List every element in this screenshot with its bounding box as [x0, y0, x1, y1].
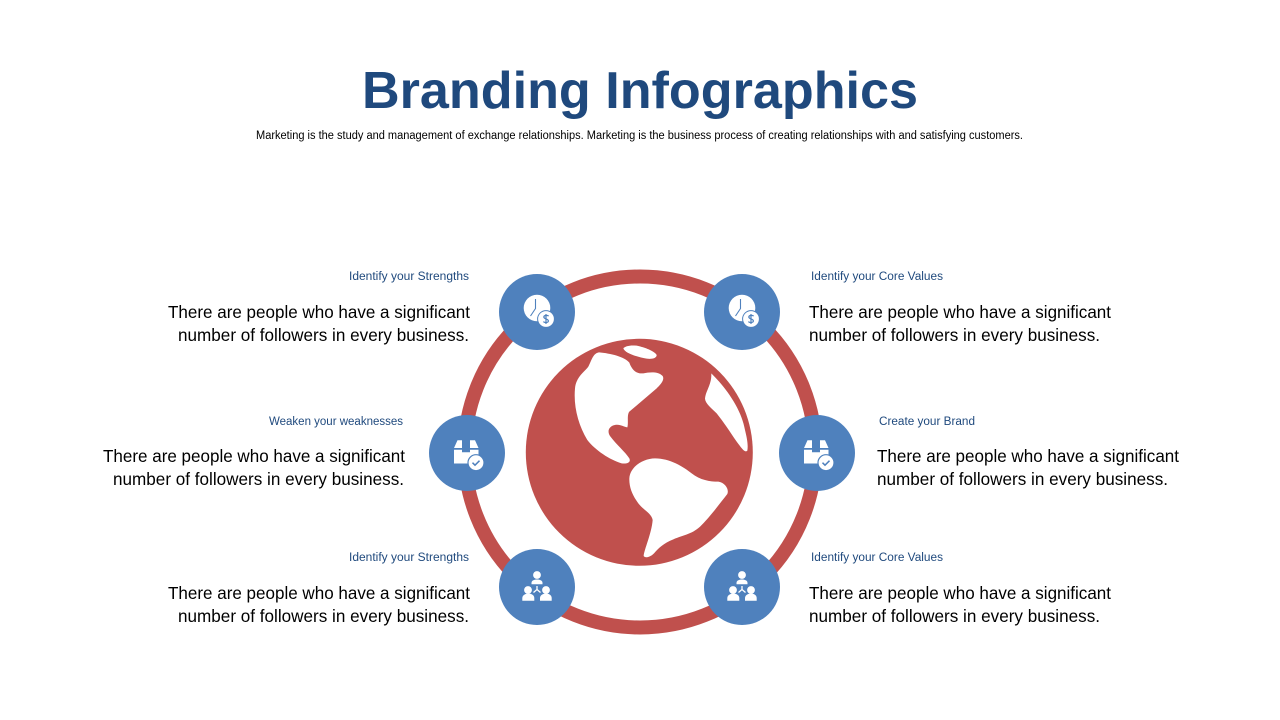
- text block: top right: There are people who have a significant: [809, 302, 1111, 322]
- text block: middle left: [103, 416, 405, 489]
- node: middle right: [779, 415, 855, 491]
- globe: [526, 339, 753, 566]
- text block: bottom right: There are people who have a significant: [809, 583, 1111, 603]
- text block: bottom right: Identify your Core Values: [811, 552, 943, 564]
- text block: middle right: [877, 416, 1179, 489]
- text block: middle right: number of followers in every business.: [877, 469, 1168, 489]
- text block: top left: number of followers in every business.: [178, 325, 469, 345]
- icon: people hierarchy: [522, 571, 552, 601]
- node: middle left: [429, 415, 505, 491]
- node: bottom left: [499, 549, 575, 625]
- text block: bottom right: number of followers in every business.: [809, 606, 1100, 626]
- node: top right: [704, 274, 780, 350]
- ring: [464, 276, 816, 628]
- text block: bottom left: Identify your Strengths: [349, 552, 469, 564]
- node: bottom right: [704, 549, 780, 625]
- text block: bottom right: [809, 552, 1111, 626]
- text block: top right: Identify your Core Values: [811, 271, 943, 283]
- icon: clock and dollar: [524, 295, 554, 327]
- subtitle: Marketing is the study and management of exchange relationships. Marketing is the business process of creating relationships with and satisfying customers.: [256, 130, 1023, 142]
- icon: box with check: [804, 440, 834, 471]
- text block: top left: There are people who have a significant: [168, 302, 470, 322]
- icon: people hierarchy: [727, 571, 757, 601]
- icon: box with check: [454, 440, 484, 471]
- text block: middle left: number of followers in every business.: [113, 469, 404, 489]
- text block: top left: [168, 271, 470, 345]
- text block: middle right: Create your Brand: [879, 416, 975, 428]
- text block: middle left: There are people who have a significant: [103, 446, 405, 466]
- text block: top right: number of followers in every business.: [809, 325, 1100, 345]
- text block: middle right: There are people who have a significant: [877, 446, 1179, 466]
- text block: top left: Identify your Strengths: [349, 271, 469, 283]
- text block: bottom left: [168, 552, 470, 626]
- text block: top right: [809, 271, 1111, 345]
- icon: clock and dollar: [729, 295, 759, 327]
- text block: bottom left: There are people who have a significant: [168, 583, 470, 603]
- title: Branding Infographics: [362, 62, 918, 120]
- node: top left: [499, 274, 575, 350]
- text block: bottom left: number of followers in every business.: [178, 606, 469, 626]
- text block: middle left: Weaken your weaknesses: [269, 416, 403, 428]
